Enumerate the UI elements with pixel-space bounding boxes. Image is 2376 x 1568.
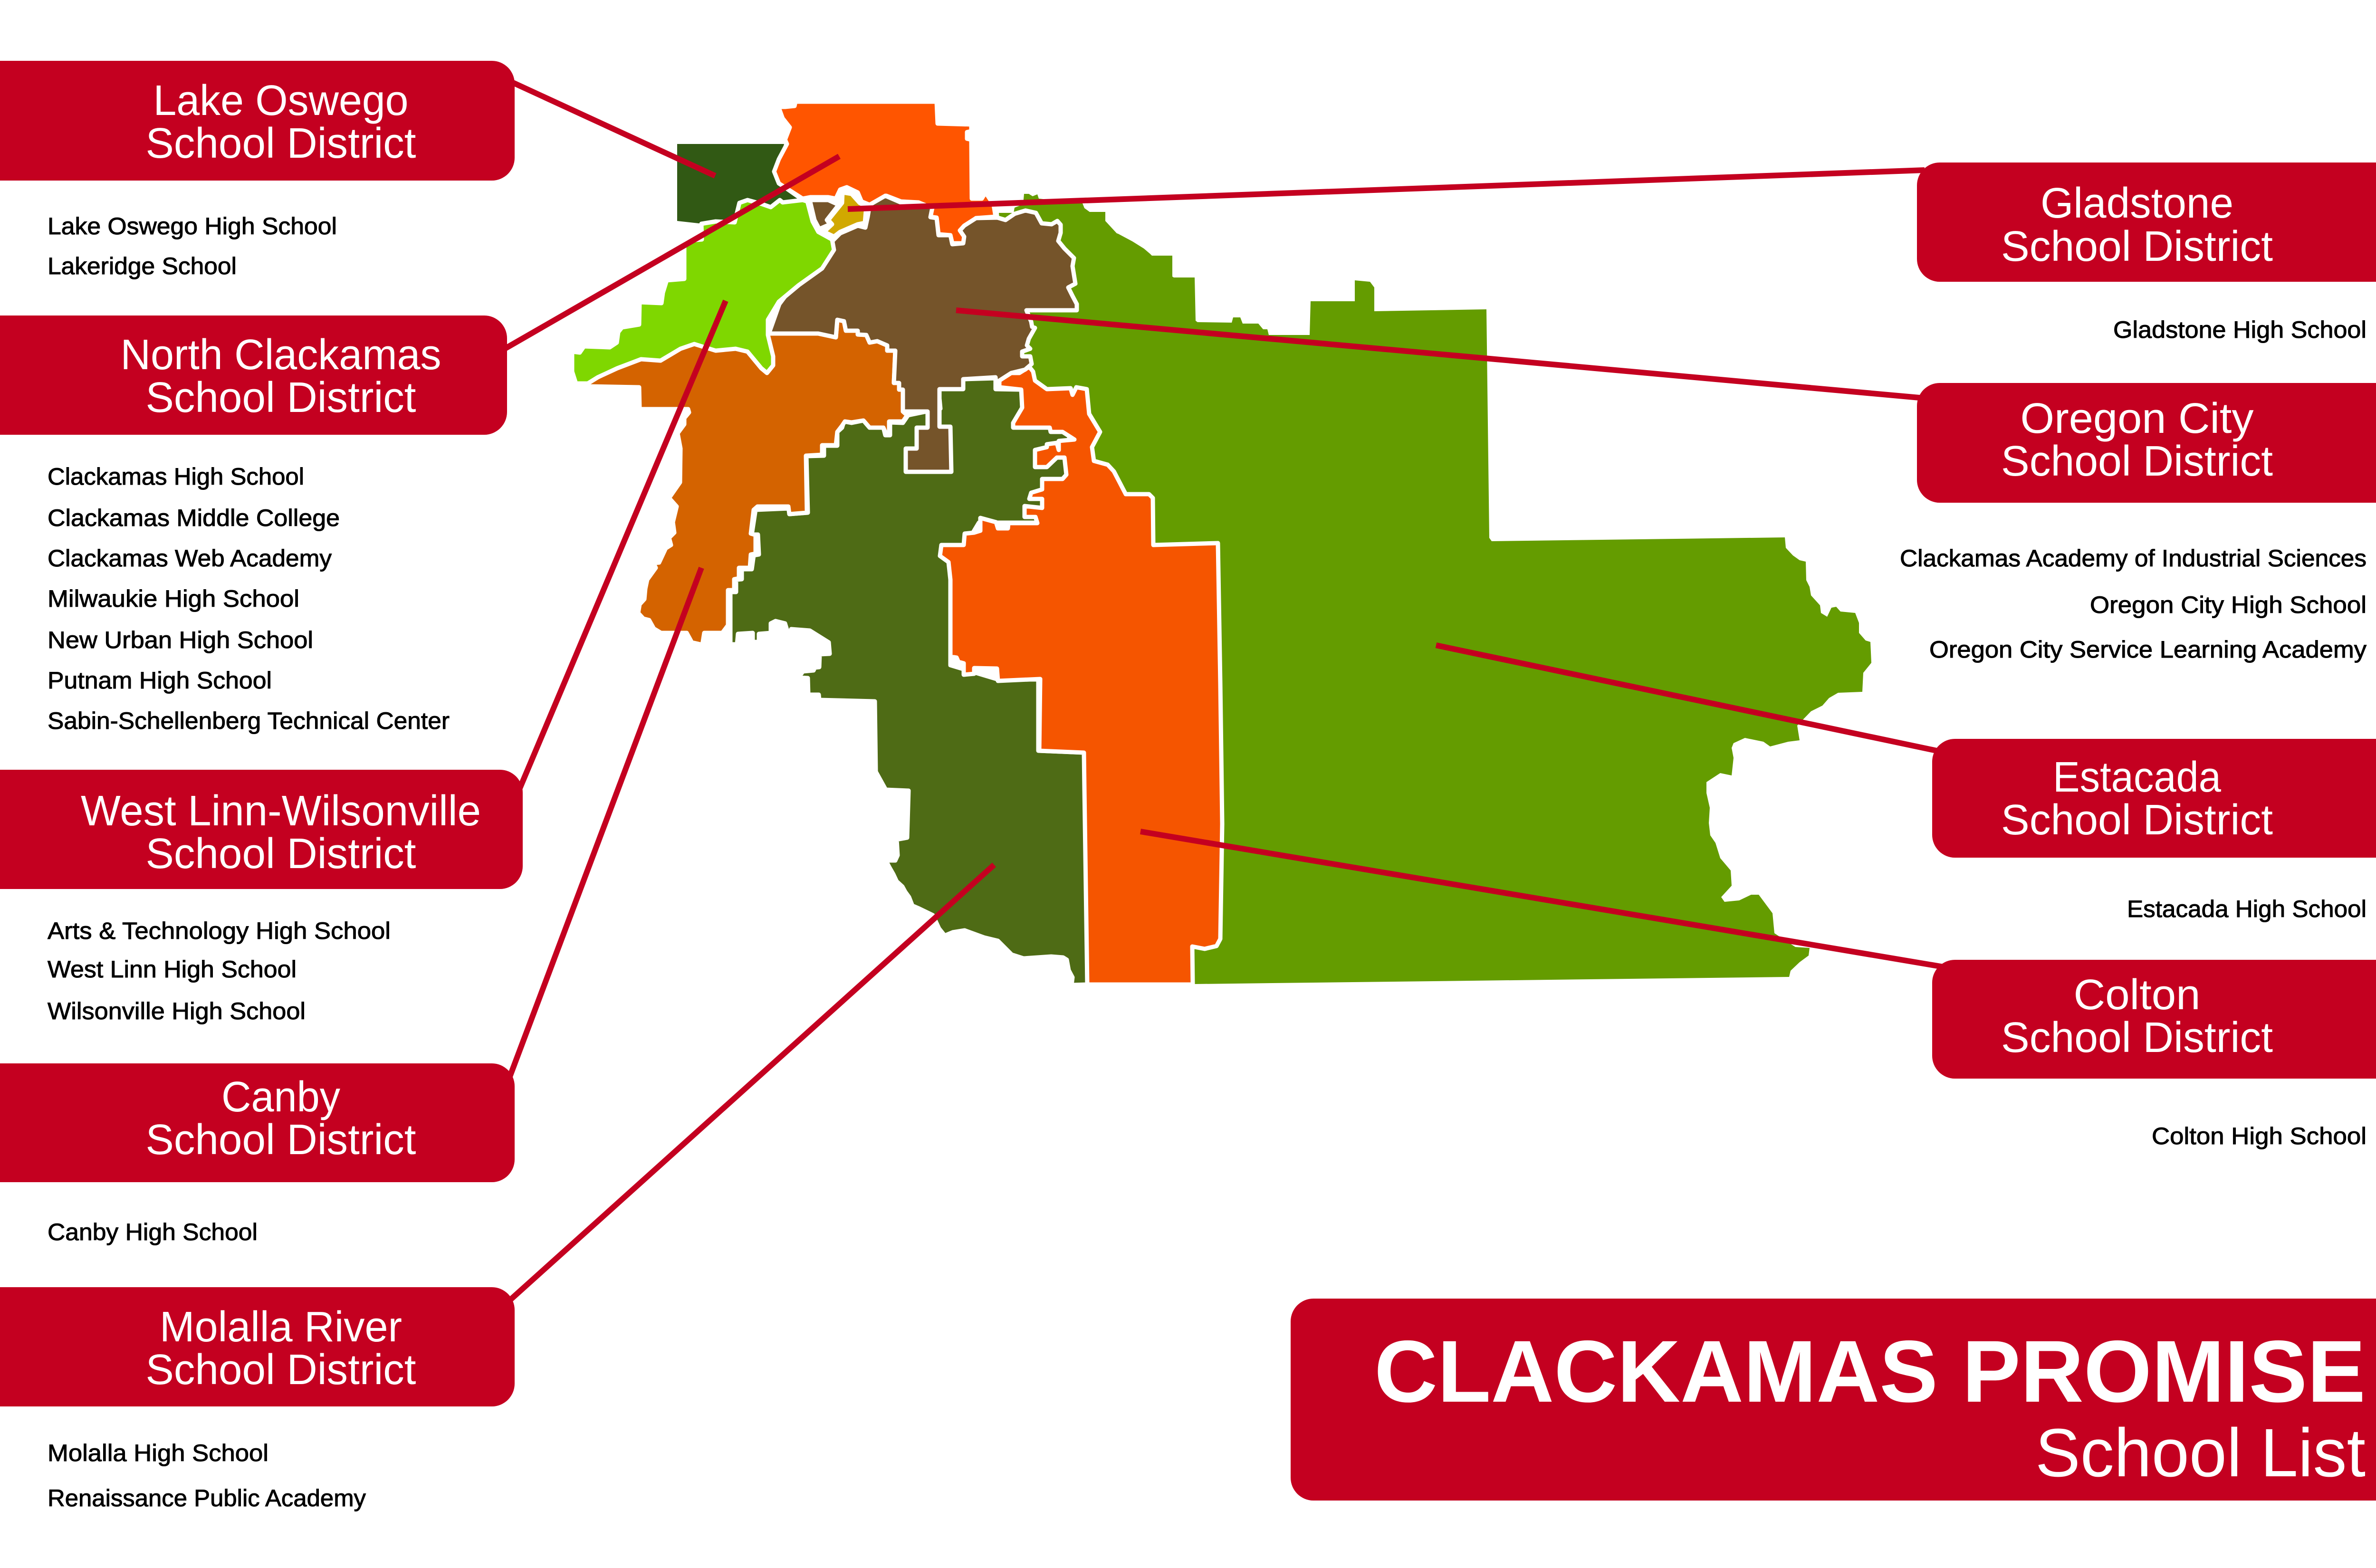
region: Canby district <box>588 320 907 645</box>
card: Lake Oswego School District: Lake Oswego <box>153 77 409 124</box>
region: Gladstone north orange district <box>774 102 996 243</box>
map: Clackamas County school districts <box>572 102 1871 985</box>
card: Molalla River School District <box>0 1287 515 1406</box>
card: Lake Oswego School District: School District <box>145 120 416 167</box>
list: Oregon City schools: Oregon City High School <box>2090 592 2366 618</box>
card: Colton School District <box>1932 960 2376 1079</box>
list: North Clackamas schools: Clackamas Middle College <box>48 505 340 531</box>
title panel <box>1291 1299 2376 1501</box>
region: Lake Oswego district <box>677 144 805 228</box>
card: North Clackamas School District: School District <box>145 374 416 421</box>
list: Lake Oswego schools: Lakeridge School <box>48 253 237 279</box>
list: West Linn-Wilsonville schools <box>48 918 391 1024</box>
list: Canby schools: Canby High School <box>48 1219 258 1245</box>
card: Estacada School District: School District <box>2001 796 2273 844</box>
card: Lake Oswego School District <box>0 61 515 181</box>
card: Estacada School District: Estacada <box>2053 754 2222 801</box>
list: Estacada schools: Estacada High School <box>2127 896 2366 922</box>
card: Colton School District: Colton <box>2074 971 2200 1019</box>
region: North Clackamas district <box>572 200 834 383</box>
card: Colton School District: School District <box>2001 1014 2273 1061</box>
card: Molalla River School District: Molalla River <box>160 1303 402 1351</box>
list: Oregon City schools <box>1900 545 2366 663</box>
card: Gladstone School District <box>1917 163 2376 282</box>
list: Oregon City schools: Clackamas Academy of Industrial Sciences <box>1900 545 2366 572</box>
list: Molalla River schools <box>48 1440 366 1511</box>
list: West Linn-Wilsonville schools: Wilsonville High School <box>48 998 306 1024</box>
card: North Clackamas School District: North Clackamas <box>121 331 441 379</box>
list: North Clackamas schools: Milwaukie High School <box>48 585 299 612</box>
list: Molalla River schools: Molalla High School <box>48 1440 268 1466</box>
card: North Clackamas School District <box>0 316 507 435</box>
list: Lake Oswego schools: Lake Oswego High School <box>48 213 337 239</box>
card: Oregon City School District: School District <box>2001 438 2273 485</box>
list: Gladstone schools: Gladstone High School <box>2113 316 2366 343</box>
list: North Clackamas schools: New Urban High School <box>48 627 313 653</box>
list: Molalla River schools: Renaissance Public Academy <box>48 1485 366 1511</box>
card: Gladstone School District: School District <box>2001 223 2273 270</box>
region: Estacada district <box>999 194 1871 984</box>
list: West Linn-Wilsonville schools: Arts & Technology High School <box>48 918 391 944</box>
region: Oregon City small pocket <box>810 200 839 229</box>
list: North Clackamas schools: Clackamas High School <box>48 463 304 490</box>
title panel: School List <box>2035 1415 2366 1491</box>
card: Oregon City School District <box>1917 383 2376 503</box>
card: West Linn-Wilsonville School District: School District <box>145 830 416 878</box>
card: Canby School District: Canby <box>221 1073 340 1121</box>
card: Estacada School District <box>1932 739 2376 858</box>
region: Molalla River district <box>730 378 1087 985</box>
title panel: CLACKAMAS PROMISE <box>1374 1323 2366 1421</box>
list: West Linn-Wilsonville schools: West Linn High School <box>48 956 297 983</box>
list: North Clackamas schools: Sabin-Schellenberg Technical Center <box>48 708 450 734</box>
card: West Linn-Wilsonville School District <box>0 770 523 889</box>
card: West Linn-Wilsonville School District: West Linn-Wilsonville <box>81 787 481 835</box>
region: Oregon City district <box>769 196 1077 472</box>
card: Molalla River School District: School District <box>145 1346 416 1394</box>
list: Lake Oswego schools <box>48 213 337 279</box>
region: gold pocket district <box>824 192 866 237</box>
region: Colton district <box>940 367 1222 985</box>
card: Canby School District: School District <box>145 1116 416 1164</box>
leader lines connecting cards to map <box>499 78 1944 1306</box>
list: North Clackamas schools <box>48 463 450 734</box>
list: Colton schools: Colton High School <box>2152 1123 2366 1149</box>
card: Oregon City School District: Oregon City <box>2021 395 2253 442</box>
card: Gladstone School District: Gladstone <box>2041 180 2233 227</box>
list: North Clackamas schools: Clackamas Web Academy <box>48 545 332 572</box>
list: North Clackamas schools: Putnam High School <box>48 667 272 694</box>
list: Oregon City schools: Oregon City Service Learning Academy <box>1929 636 2366 663</box>
card: Canby School District <box>0 1063 515 1182</box>
